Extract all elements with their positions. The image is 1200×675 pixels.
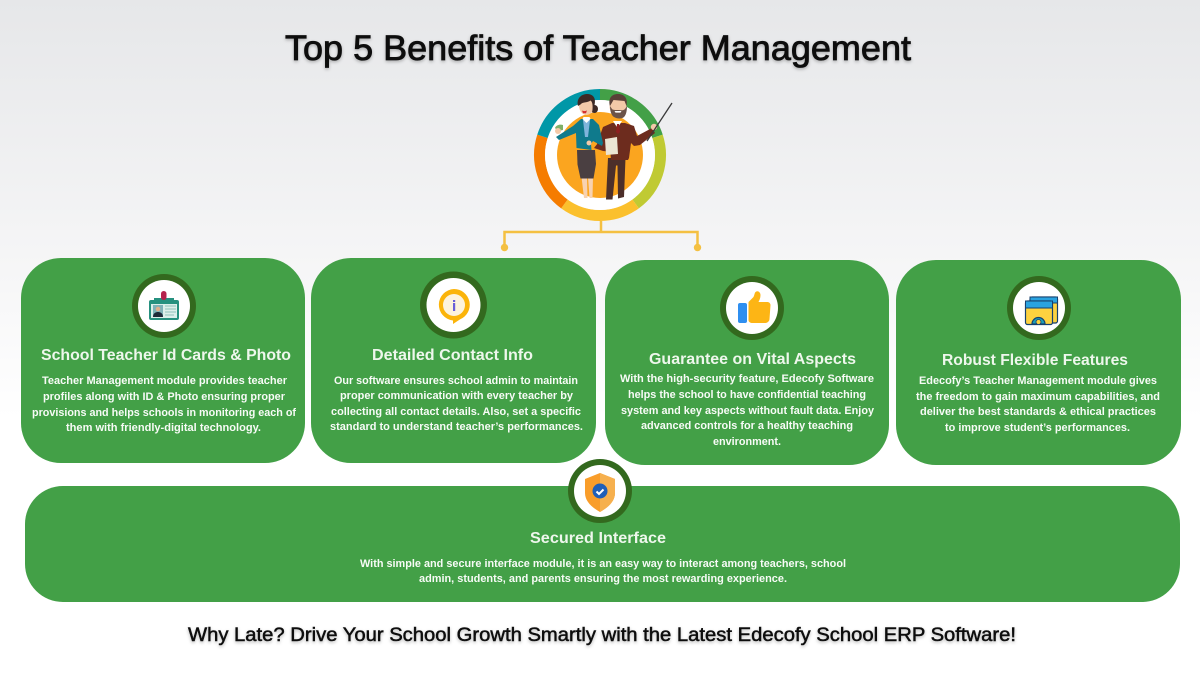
body text [360,558,846,585]
body text: admin, students, and parents ensuring the most rewarding experience. [419,573,787,585]
body text: to improve student’s performances. [945,422,1130,434]
footer tagline: Why Late? Drive Your School Growth Smartly with the Latest Edecofy School ERP Software! [188,624,1016,646]
heading: Guarantee on Vital Aspects [649,351,856,368]
ring segments [540,94,660,215]
icon: id card [132,274,196,338]
panel: Secured Interface [25,459,1180,602]
body text: collecting all contact details. Also, set a specific [331,406,581,418]
body text [32,375,296,434]
body text: them with friendly-digital technology. [66,422,261,434]
body text: the freedom to gain maximum capabilities, and [916,391,1160,403]
heading: School Teacher Id Cards & Photo [41,347,291,364]
icon: windows with gear [1007,276,1071,340]
central illustration: teachers in segmented ring [540,94,672,215]
body text: advanced controls for a healthy teaching [641,420,853,432]
body text: helps the school to have confidential teaching [628,389,866,401]
icon: info speech bubble [420,272,487,338]
body text: Our software ensures school admin to maintain [334,375,578,387]
woman teacher [555,94,603,198]
body text [330,375,583,433]
body text: Teacher Management module provides teacher [42,375,287,387]
body text: With the high-security feature, Edecofy Software [620,373,874,385]
body text: profiles along with ID & Photo ensuring proper [43,391,285,403]
panel: Detailed Contact Info [311,258,596,463]
body text: system and key aspects without fault data. Enjoy [621,405,874,417]
man teacher with pointer [594,94,672,200]
body text: standard to understand teacher’s performances. [330,421,583,433]
body text: With simple and secure interface module, it is an easy way to interact among teachers, school [360,558,846,570]
heading: Secured Interface [530,530,666,547]
icon: shield [568,459,632,523]
connector [501,221,701,251]
icon: thumbs up [720,276,784,340]
panel: School Teacher Id Cards & Photo [21,258,305,463]
body text: environment. [713,436,781,448]
body text [620,373,874,448]
body text: proper communication with every teacher by [340,390,573,402]
panel: Robust Flexible Features [896,260,1181,465]
heading: Robust Flexible Features [942,352,1128,369]
heading: Detailed Contact Info [372,347,533,364]
title: Top 5 Benefits of Teacher Management [285,29,911,68]
body text [916,375,1160,434]
body text: Edecofy’s Teacher Management module gives [919,375,1157,387]
body text: provisions and helps schools in monitoring each of [32,407,296,419]
body text: deliver the best standards & ethical practices [920,406,1156,418]
panel: Guarantee on Vital Aspects [605,260,889,465]
